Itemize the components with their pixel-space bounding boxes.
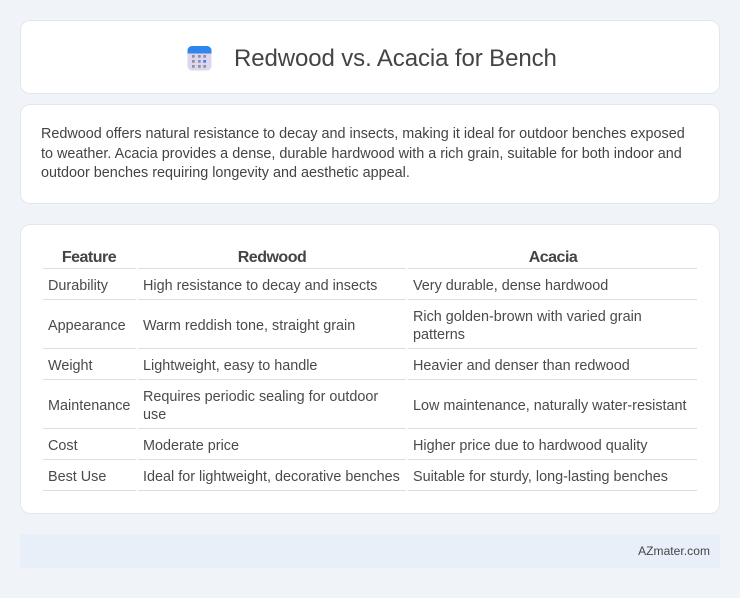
row: durability: Very durable, dense hardwood [413, 278, 608, 294]
footer credit: AZmater.com [638, 544, 710, 558]
row: cost: Cost [48, 438, 78, 454]
row: weight [48, 358, 630, 374]
table header: Acacia [529, 249, 577, 266]
panel: title card [20, 20, 720, 94]
row: best use: Best Use [48, 469, 106, 485]
title: Redwood vs. Acacia for Bench [234, 45, 557, 72]
summary paragraph: outdoor benches requiring longevity and aesthetic appeal. [41, 165, 410, 181]
row: durability: Durability [48, 278, 108, 294]
row: appearance: Warm reddish tone, straight grain [143, 318, 355, 334]
row: best use: Ideal for lightweight, decorative benches [143, 469, 400, 485]
panel: comparison table [20, 224, 720, 514]
row: maintenance [48, 389, 687, 423]
row: maintenance: Requires periodic sealing for outdoor [143, 389, 378, 405]
row: maintenance: Low maintenance, naturally water-resistant [413, 398, 687, 414]
row: appearance [48, 309, 642, 343]
row: weight: Heavier and denser than redwood [413, 358, 630, 374]
row: cost [48, 438, 648, 454]
row: best use [48, 469, 668, 485]
panel: summary text [20, 104, 720, 204]
row: appearance: Appearance [48, 318, 126, 334]
summary paragraph: to weather. Acacia provides a dense, durable hardwood with a rich grain, suitable for both indoor and [41, 146, 682, 162]
table header: Redwood [238, 249, 306, 266]
summary paragraph: Redwood offers natural resistance to decay and insects, making it ideal for outdoor benches exposed [41, 126, 685, 142]
row: durability: High resistance to decay and insects [143, 278, 377, 294]
row: best use: Suitable for sturdy, long-lasting benches [413, 469, 668, 485]
icon: calendar [188, 46, 212, 70]
table header: Feature [62, 249, 116, 266]
row: appearance: Rich golden-brown with varied grain [413, 309, 642, 325]
footer bar [20, 534, 720, 568]
row: cost: Higher price due to hardwood quality [413, 438, 647, 454]
row: cost: Moderate price [143, 438, 239, 454]
table header [62, 249, 578, 266]
row: weight: Weight [48, 358, 93, 374]
row: maintenance: Maintenance [48, 398, 130, 414]
row: durability [48, 278, 608, 294]
row: weight: Lightweight, easy to handle [143, 358, 317, 374]
summary paragraph [41, 126, 685, 181]
row: maintenance: use [143, 407, 166, 423]
row: appearance: patterns [413, 327, 465, 343]
